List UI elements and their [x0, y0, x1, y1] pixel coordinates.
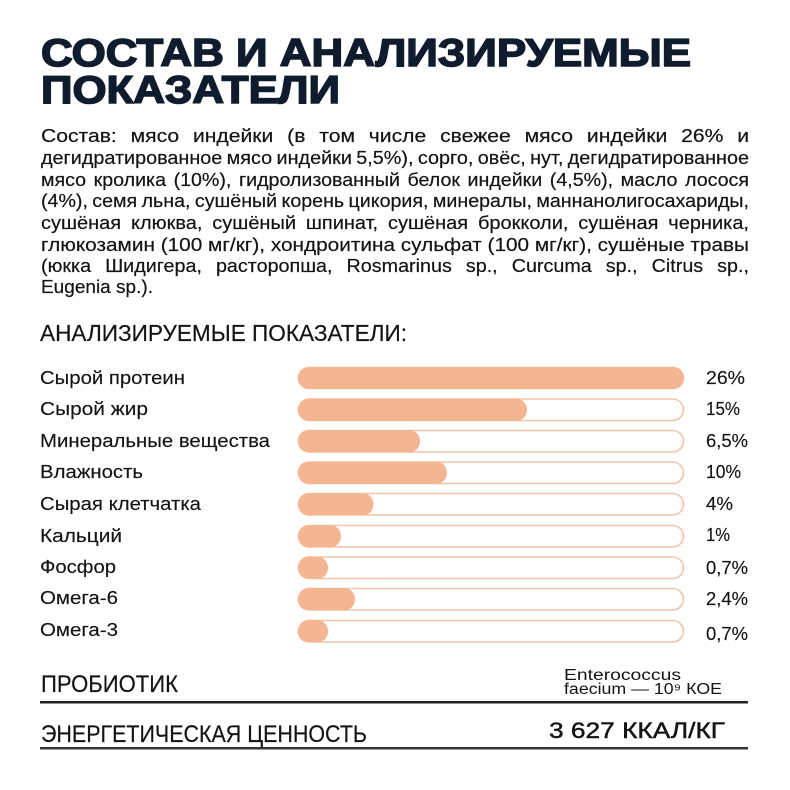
- row: calcium 1%: [40, 524, 730, 548]
- row: omega-3 0,7%: [40, 619, 748, 644]
- row: minerals 6,5%: 6,5%: [706, 430, 748, 451]
- row: omega-6 2,4%: [40, 587, 748, 610]
- row: crude protein 26%: 26%: [706, 367, 745, 388]
- row: probiotic: faecium — 10⁹ КОЕ: [564, 681, 722, 698]
- row: moisture 10%: 10%: [706, 461, 741, 482]
- text block: composition: Eugenia sp.).: [41, 276, 153, 297]
- row: omega-6 2,4%: 2,4%: [706, 588, 748, 609]
- text block: composition: [41, 125, 749, 297]
- row: crude fibre 4%: 4%: [706, 493, 733, 514]
- row: minerals 6,5%: [40, 430, 748, 452]
- text block: composition: сушёная клюква, сушёный шпинат, сушёная брокколи, сушёная черника,: [41, 212, 749, 233]
- row: crude fibre 4%: [40, 493, 733, 516]
- title: [41, 32, 691, 112]
- row: moisture 10%: Влажность: [40, 461, 143, 482]
- row: crude fat 15%: Сырой жир: [40, 398, 148, 419]
- heading: analysed indicators: АНАЛИЗИРУЕМЫЕ ПОКАЗАТЕЛИ:: [40, 320, 407, 346]
- row: phosphorus 0,7%: [40, 556, 748, 579]
- row: crude fat 15%: 15%: [706, 398, 740, 419]
- row: omega-6 2,4%: Омега-6: [40, 587, 118, 608]
- row: calcium 1%: 1%: [706, 524, 730, 545]
- row: probiotic: [40, 667, 748, 704]
- row: phosphorus 0,7%: 0,7%: [706, 557, 748, 578]
- title: ПОКАЗАТЕЛИ: [41, 69, 340, 112]
- row: crude protein 26%: [40, 367, 745, 389]
- row: energy value: 3 627 ККАЛ/КГ: [549, 718, 725, 743]
- row: probiotic: Enterococcus: [564, 667, 681, 684]
- row: calcium 1%: Кальций: [40, 525, 122, 546]
- text block: composition: мясо кролика (10%), гидролизованный белок индейки (4,5%), масло лосося: [41, 169, 749, 190]
- row: minerals 6,5%: Минеральные вещества: [40, 430, 271, 451]
- text block: composition: глюкозамин (100 мг/кг), хондроитина сульфат (100 мг/кг), сушёные травы: [41, 234, 749, 255]
- row: moisture 10%: [40, 461, 741, 484]
- text block: composition: (4%), семя льна, сушёный корень цикория, минералы, маннанолигосахариды,: [41, 190, 749, 211]
- row: omega-3 0,7%: 0,7%: [706, 623, 748, 644]
- text block: composition: (юкка Шидигера, расторопша, Rosmarinus sp., Curcuma sp., Citrus sp.,: [41, 255, 749, 276]
- text block: composition: дегидратированное мясо индейки 5,5%), сорго, овёс, нут, дегидратированное: [41, 147, 749, 168]
- bar chart: analysed indicators: [40, 367, 748, 644]
- row: probiotic: ПРОБИОТИК: [41, 671, 178, 698]
- text block: composition: Состав: мясо индейки (в том числе свежее мясо индейки 26% и: [41, 125, 749, 146]
- title: СОСТАВ И АНАЛИЗИРУЕМЫЕ: [41, 32, 691, 75]
- row: energy value: ЭНЕРГЕТИЧЕСКАЯ ЦЕННОСТЬ: [41, 721, 367, 748]
- row: crude protein 26%: Сырой протеин: [40, 367, 185, 388]
- row: omega-3 0,7%: Омега-3: [40, 619, 118, 640]
- row: phosphorus 0,7%: Фосфор: [40, 556, 116, 577]
- row: crude fat 15%: [40, 398, 740, 421]
- row: crude fibre 4%: Сырая клетчатка: [40, 493, 202, 514]
- row: energy value: [40, 718, 748, 750]
